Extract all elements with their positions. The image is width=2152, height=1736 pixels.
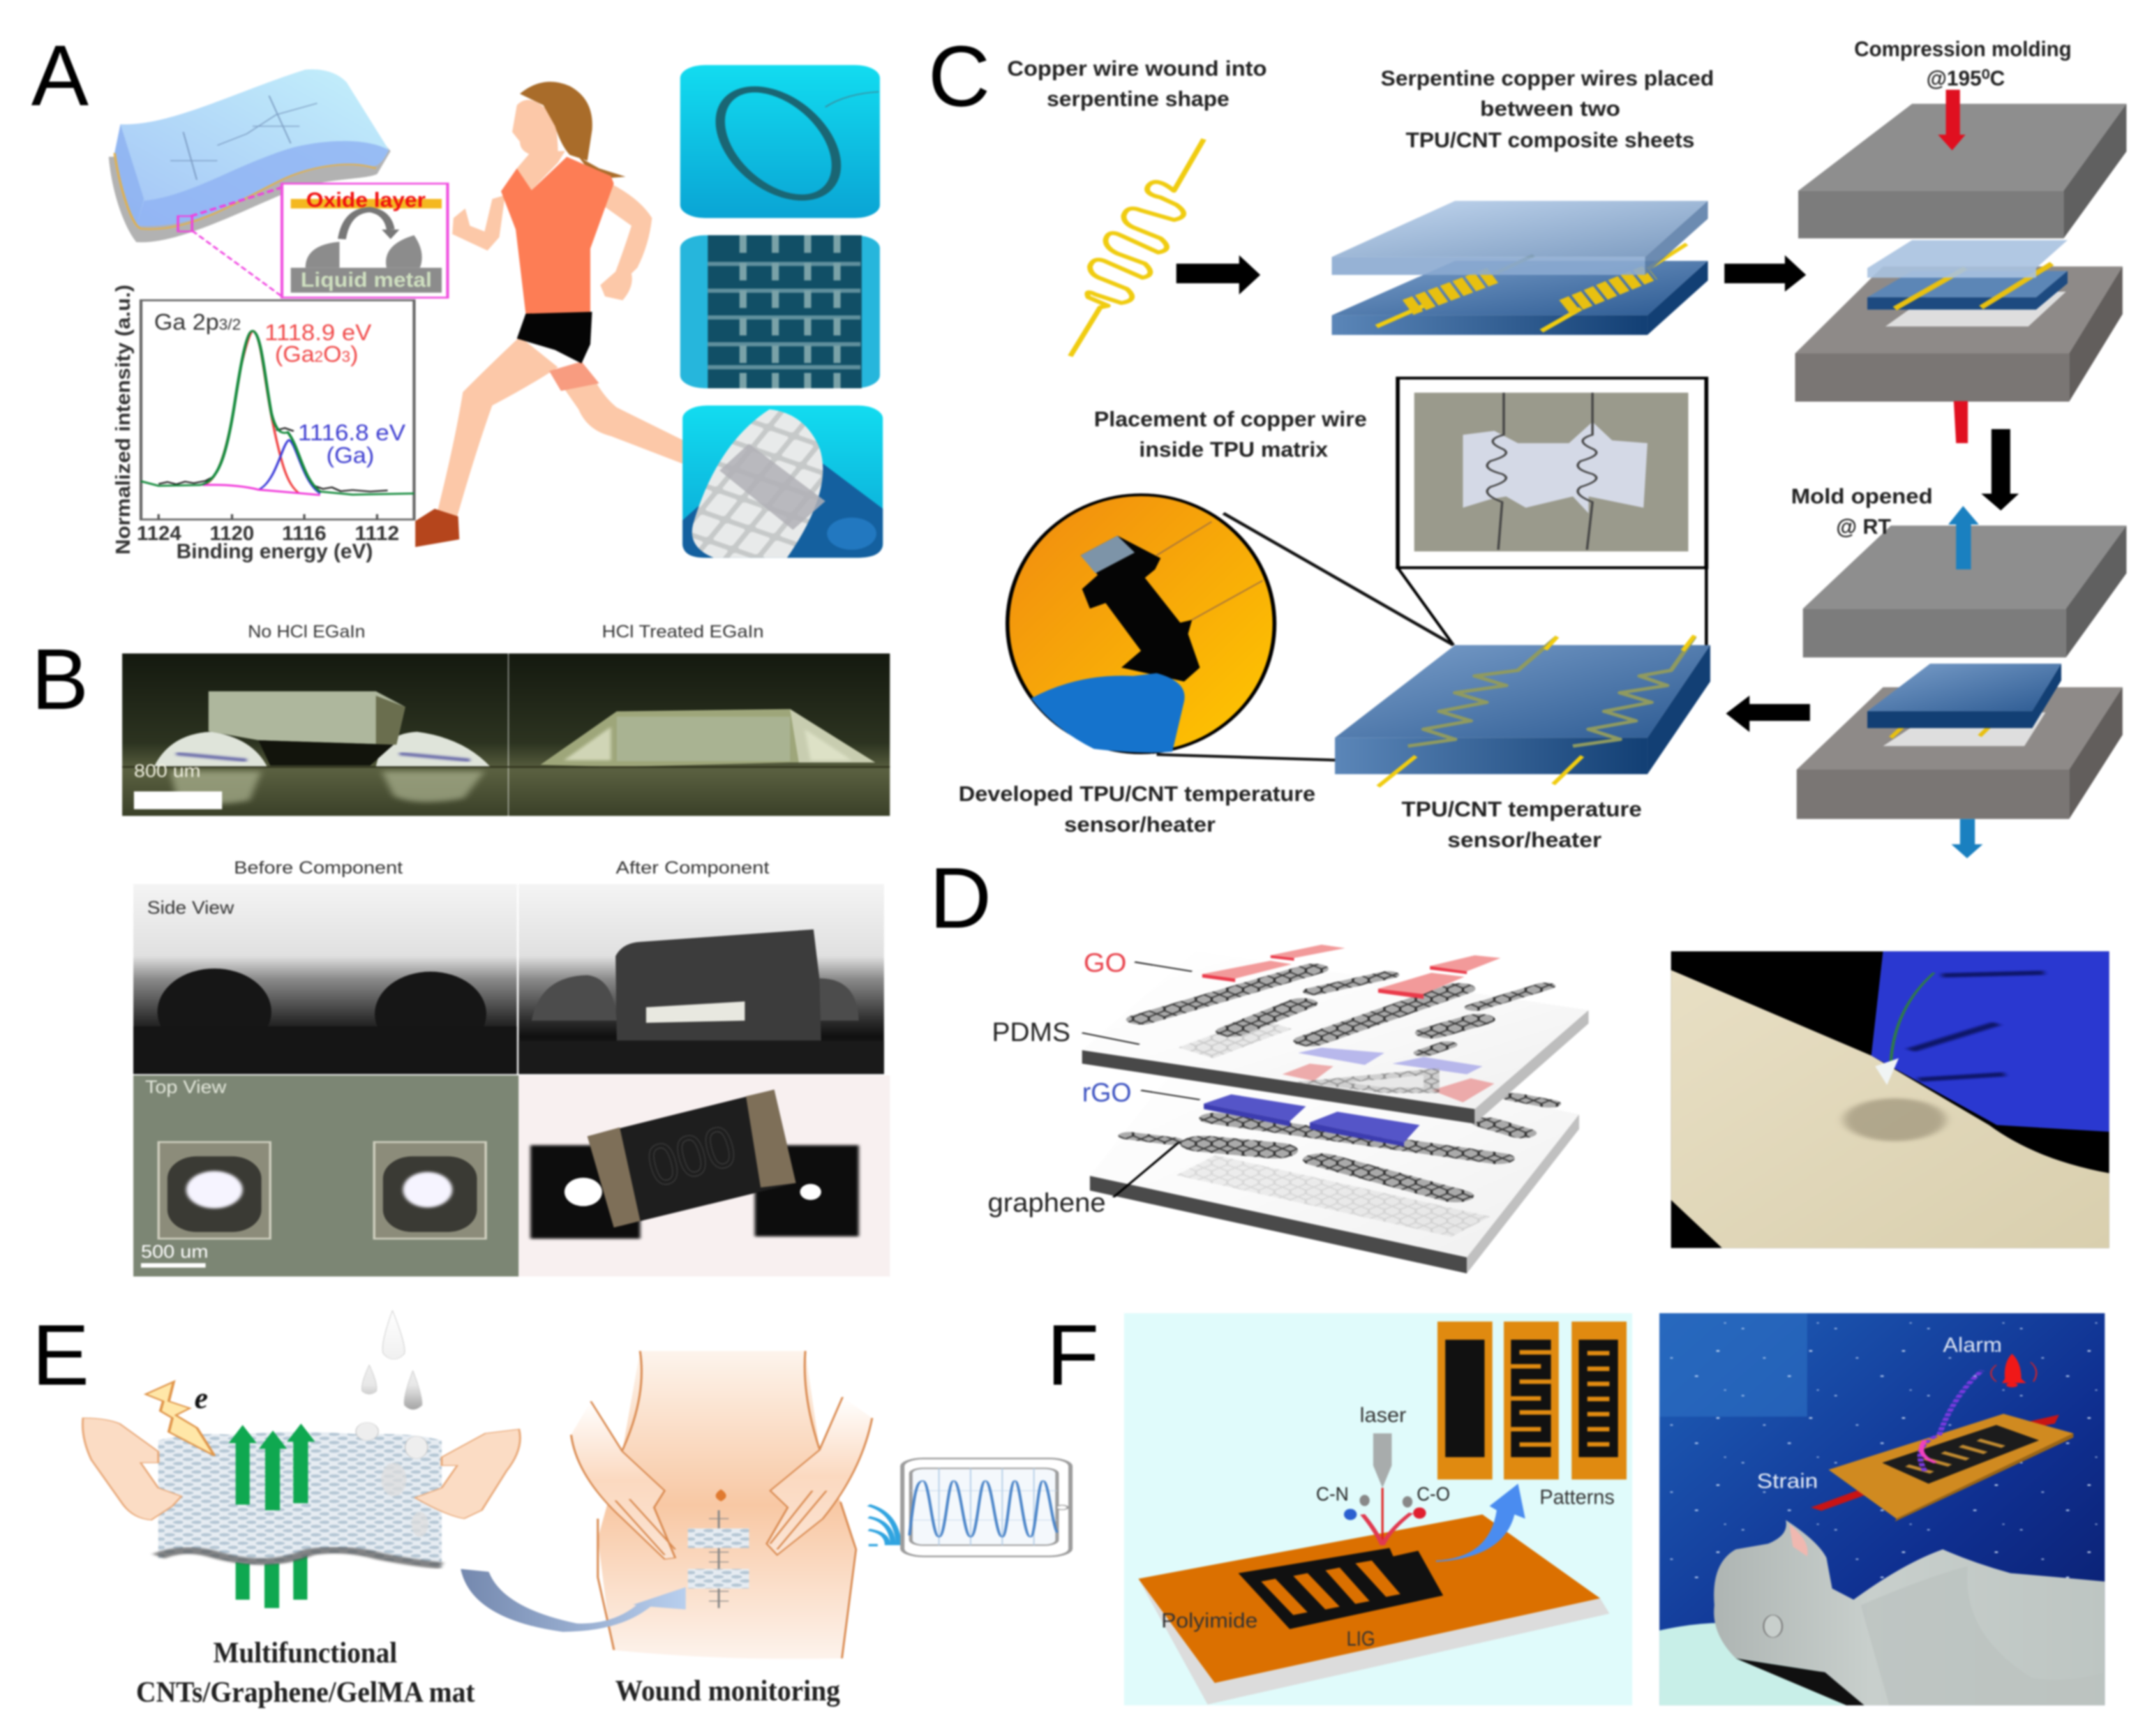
- micrograph grid: before and after component: After Component: [616, 858, 770, 878]
- callout: oxide layer inset: [178, 184, 447, 298]
- illustration: strain sensor alarm over sleeping patient: Alarm: [1943, 1334, 2002, 1357]
- label: mat name: CNTs/Graphene/GelMA mat: [136, 1677, 475, 1709]
- label: wound monitoring: Wound monitoring: [615, 1675, 840, 1707]
- arrow: to compression molding: [1724, 255, 1806, 292]
- icon: wireless signal: [869, 1505, 899, 1546]
- chart: Ga 2p3/2 XPS spectrum: 1124: [137, 523, 181, 545]
- chart: Ga 2p3/2 XPS spectrum: (Ga2O3): [275, 341, 358, 366]
- step label: sheets: between two: [1480, 96, 1620, 121]
- layer labels: graphene: [988, 1189, 1106, 1218]
- illustration: abdomen with wound patches: [571, 1351, 872, 1659]
- letter C: C: [928, 29, 990, 125]
- letter D: D: [929, 851, 992, 947]
- layer labels: PDMS: [992, 1018, 1070, 1047]
- diagram: laser writing on polyimide: laser: [1360, 1404, 1406, 1427]
- photo: woven textile: [680, 235, 880, 388]
- callout: oxide layer inset: Liquid metal: [301, 269, 432, 292]
- chart: Ga 2p3/2 XPS spectrum: Ga 2p3/2: [154, 309, 241, 335]
- step label: TPU/CNT sensor: sensor/heater: [1447, 828, 1601, 852]
- micrograph pair: HCl treatment: [122, 622, 890, 816]
- micrograph pair: HCl treatment: 800 um: [134, 762, 201, 781]
- panel C: TPU/CNT sensor fabrication process: [928, 29, 2126, 858]
- step label: TPU/CNT sensor: TPU/CNT temperature: [1402, 797, 1642, 821]
- illustration: finished TPU/CNT sheet: [1335, 636, 1710, 786]
- letter B: B: [31, 631, 89, 728]
- chart: Ga 2p3/2 XPS spectrum: 1116: [282, 523, 327, 545]
- step label: compression molding: Compression molding: [1854, 37, 2072, 61]
- step label: compression molding: @195⁰C: [1927, 66, 2005, 90]
- panel A: liquid metal wearable: [31, 28, 883, 563]
- layer labels: [988, 948, 1131, 1218]
- panel E: multifunctional mat for wound monitoring: [32, 1307, 1070, 1709]
- step label: mold opened: Mold opened: [1791, 484, 1933, 508]
- illustration: wires between two sheets: [1332, 201, 1708, 335]
- step label: placement: Placement of copper wire: [1094, 407, 1367, 431]
- micrograph pair: HCl treatment: No HCl EGaIn: [248, 622, 365, 642]
- letter F: F: [1047, 1307, 1099, 1403]
- chart: Ga 2p3/2 XPS spectrum: 1120: [209, 523, 254, 545]
- illustration: mold opened: [1797, 506, 2126, 858]
- step label: placement: inside TPU matrix: [1139, 437, 1328, 462]
- step label: copper wire: serpentine shape: [1047, 87, 1230, 111]
- flexible sheet illustration: [109, 69, 391, 242]
- label: mat name: [136, 1637, 475, 1709]
- label: mat name: Multifunctional: [213, 1637, 397, 1669]
- step label: sheets: TPU/CNT composite sheets: [1406, 128, 1694, 152]
- label: electron: e: [195, 1382, 208, 1415]
- diagram: laser writing on polyimide: Patterns: [1539, 1486, 1615, 1509]
- micrograph grid: before and after component: Side View: [147, 899, 234, 918]
- step label: copper wire: Copper wire wound into: [1007, 56, 1267, 80]
- panel B: EGaIn solder micrographs: [31, 622, 890, 1276]
- arrow: to sheets: [1176, 255, 1260, 294]
- micrograph grid: before and after component: 500 um: [141, 1242, 209, 1262]
- micrograph grid: before and after component: [133, 858, 890, 1276]
- chart: Ga 2p3/2 XPS spectrum: Binding energy (eV): [177, 540, 373, 563]
- chart: Ga 2p3/2 XPS spectrum: 1118.9 eV: [264, 320, 371, 345]
- inset: photo of copper wire inside TPU: [1398, 378, 1706, 645]
- step label: developed sensor: sensor/heater: [1064, 812, 1216, 837]
- photo: sensor on shoe sole: [682, 405, 883, 558]
- micrograph grid: before and after component: Before Component: [234, 858, 403, 878]
- step label: sheets: [1381, 66, 1714, 152]
- step label: mold opened: @ RT: [1836, 514, 1891, 539]
- chart: Ga 2p3/2 XPS spectrum: 1116.8 eV: [298, 419, 405, 445]
- letter E: E: [32, 1307, 89, 1403]
- chart: Ga 2p3/2 XPS spectrum: Normalized intensity (a.u.): [112, 285, 135, 555]
- photo: developed sensor under thermal view: [1008, 495, 1454, 760]
- illustration: strain sensor alarm over sleeping patient: Strain: [1757, 1470, 1818, 1493]
- arrow: mat applied to wound: [461, 1569, 686, 1632]
- illustration: mat held by hands with arrows: [82, 1310, 520, 1608]
- photo: ring device: [680, 65, 880, 218]
- step label: compression molding: [1854, 37, 2072, 90]
- step label: developed sensor: [959, 781, 1315, 837]
- step label: placement: [1094, 407, 1367, 462]
- micrograph grid: before and after component: Top View: [145, 1077, 227, 1097]
- arrow: mold down: [1981, 429, 2019, 511]
- illustration: strain sensor alarm over sleeping patient: [1659, 1313, 2105, 1705]
- layer labels: GO: [1084, 948, 1127, 978]
- diagram: laser writing on polyimide: C-O: [1417, 1483, 1450, 1505]
- micrograph pair: HCl treatment: HCl Treated EGaIn: [602, 622, 764, 642]
- callout: oxide layer inset: Oxide layer: [306, 189, 426, 212]
- micrograph grid: before and after component: 000: [640, 1112, 743, 1199]
- chart: Ga 2p3/2 XPS spectrum: [112, 285, 414, 563]
- diagram: laser writing on polyimide: C-N: [1316, 1483, 1349, 1505]
- arrow: to finished sensor: [1726, 696, 1810, 732]
- step label: mold opened: [1791, 484, 1933, 539]
- step label: copper wire: [1007, 56, 1267, 111]
- illustration: running woman: [415, 82, 682, 547]
- layer labels: rGO: [1082, 1078, 1131, 1107]
- step label: developed sensor: Developed TPU/CNT temperature: [959, 781, 1315, 806]
- icon: phone with sine wave: [902, 1458, 1070, 1557]
- letter A: A: [31, 28, 89, 124]
- illustration: mold closing: [1795, 90, 2126, 443]
- photo: tattoo on arm with gloved hand: [1671, 951, 2109, 1248]
- panel F: laser-induced graphene sensor: [1047, 1307, 2105, 1705]
- diagram: laser writing on polyimide: [1124, 1313, 1632, 1705]
- panel D: graphene electronic tattoo: [929, 851, 2109, 1273]
- diagram: exploded layer stack: [1082, 945, 1589, 1273]
- diagram: laser writing on polyimide: Polyimide: [1161, 1610, 1257, 1633]
- chart: Ga 2p3/2 XPS spectrum: (Ga): [327, 442, 374, 468]
- chart: Ga 2p3/2 XPS spectrum: 1112: [354, 523, 399, 545]
- diagram: laser writing on polyimide: LIG: [1347, 1627, 1375, 1650]
- step label: TPU/CNT sensor: [1402, 797, 1642, 852]
- icon: serpentine copper wire: [1070, 139, 1204, 357]
- step label: sheets: Serpentine copper wires placed: [1381, 66, 1714, 90]
